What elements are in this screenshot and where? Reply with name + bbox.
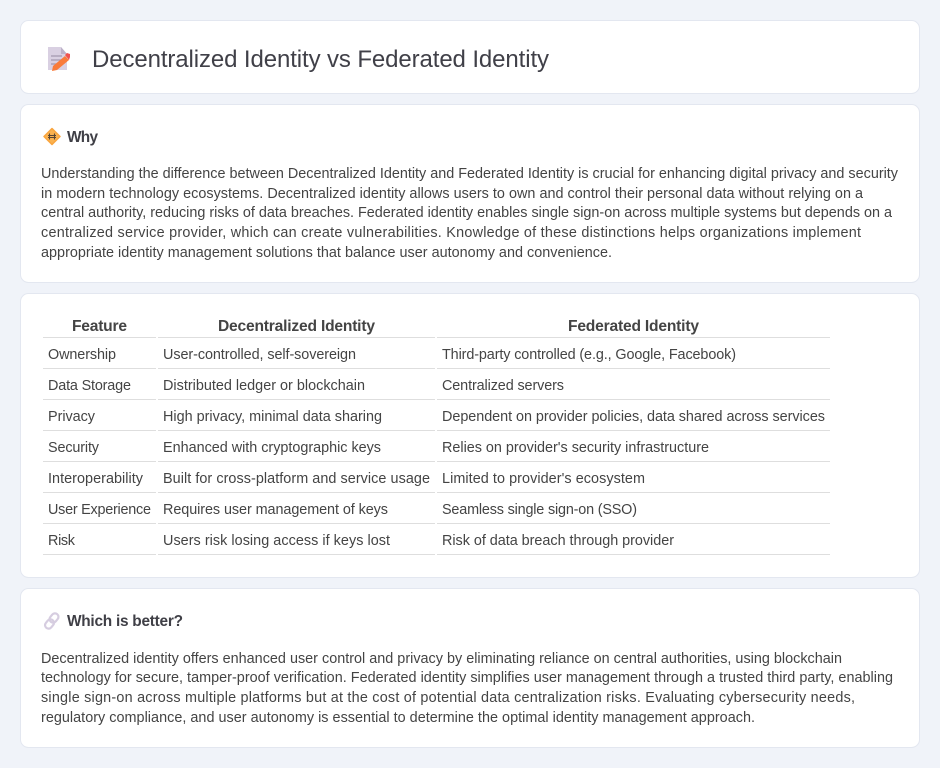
table header row bbox=[72, 318, 699, 335]
text block: which is better paragraph: regulatory compliance, and user autonomy is essential to determine the optimal identity management approach. bbox=[41, 710, 755, 726]
row: risk: Users risk losing access if keys lost bbox=[163, 533, 390, 549]
row: privacy: Dependent on provider policies, data shared across services bbox=[442, 409, 825, 425]
heading: which is better: Which is better? bbox=[67, 613, 183, 630]
table header row: Decentralized Identity bbox=[218, 318, 375, 335]
text block: which is better paragraph: single sign-on across multiple platforms but at the cost of potential data centralization risks. Evaluating cybersecurity needs, bbox=[41, 690, 855, 706]
text block: why paragraph: Understanding the difference between Decentralized Identity and Federated Identity is crucial for enhancing digital privacy and security bbox=[41, 166, 899, 182]
table header row: Federated Identity bbox=[568, 318, 699, 335]
text block: which is better paragraph bbox=[41, 651, 893, 726]
text block: which is better paragraph: technology for secure, tamper-proof verification. Federated identity simplifies user management through a trusted third party, enabling bbox=[41, 670, 893, 686]
row: risk: Risk bbox=[48, 533, 76, 549]
icon: document with pencil bbox=[48, 47, 70, 71]
text block: which is better paragraph: Decentralized identity offers enhanced user control and privacy by eliminating reliance on central authorities, using blockchain bbox=[41, 651, 842, 667]
heading: why: Why bbox=[67, 129, 98, 146]
text block: why paragraph bbox=[41, 166, 899, 261]
title: Decentralized Identity vs Federated Identity bbox=[92, 46, 549, 73]
row: security: Enhanced with cryptographic keys bbox=[163, 440, 381, 456]
row: privacy bbox=[48, 409, 825, 425]
text block: why paragraph: appropriate identity management solutions that balance user autonomy and convenience. bbox=[41, 245, 612, 261]
row: ownership: Third-party controlled (e.g., Google, Facebook) bbox=[442, 347, 736, 363]
row: security: Relies on provider's security infrastructure bbox=[442, 440, 709, 456]
row: data storage bbox=[48, 378, 564, 394]
row: security: Security bbox=[48, 440, 100, 456]
row: user experience: Requires user management of keys bbox=[163, 502, 388, 518]
icon: warning diamond bbox=[44, 128, 60, 144]
row: data storage: Distributed ledger or blockchain bbox=[163, 378, 365, 394]
row: data storage: Data Storage bbox=[48, 378, 131, 394]
row: risk bbox=[48, 533, 674, 549]
row: privacy: Privacy bbox=[48, 409, 96, 425]
table header row: Feature bbox=[72, 318, 127, 335]
text block: why paragraph: centralized service provider, which can create vulnerabilities. Knowledge of these distinctions helps organizations implement bbox=[41, 225, 861, 241]
row: interoperability: Limited to provider's ecosystem bbox=[442, 471, 645, 487]
row: interoperability: Interoperability bbox=[48, 471, 144, 487]
row: security bbox=[48, 440, 709, 456]
icon: chain link bbox=[44, 612, 60, 630]
row: user experience: Seamless single sign-on (SSO) bbox=[442, 502, 637, 518]
row: ownership bbox=[48, 347, 736, 363]
panel: which is better bbox=[20, 588, 920, 748]
row: ownership: User-controlled, self-sovereign bbox=[163, 347, 356, 363]
text block: why paragraph: in modern technology ecosystems. Decentralized identity allows users to own and control their personal data without relying on a bbox=[41, 186, 863, 202]
row: interoperability: Built for cross-platform and service usage bbox=[163, 471, 430, 487]
text block: why paragraph: central authority, reducing risks of data breaches. Federated identity enables single sign-on across multiple systems but depends on a bbox=[41, 205, 892, 221]
row: risk: Risk of data breach through provider bbox=[442, 533, 674, 549]
row: user experience: User Experience bbox=[48, 502, 151, 518]
row: privacy: High privacy, minimal data sharing bbox=[163, 409, 382, 425]
row: interoperability bbox=[48, 471, 645, 487]
panel: why bbox=[20, 104, 920, 282]
panel: comparison table bbox=[20, 294, 920, 578]
row: user experience bbox=[48, 502, 637, 518]
panel: header bbox=[20, 20, 920, 94]
row: ownership: Ownership bbox=[48, 347, 116, 363]
row: data storage: Centralized servers bbox=[442, 378, 564, 394]
